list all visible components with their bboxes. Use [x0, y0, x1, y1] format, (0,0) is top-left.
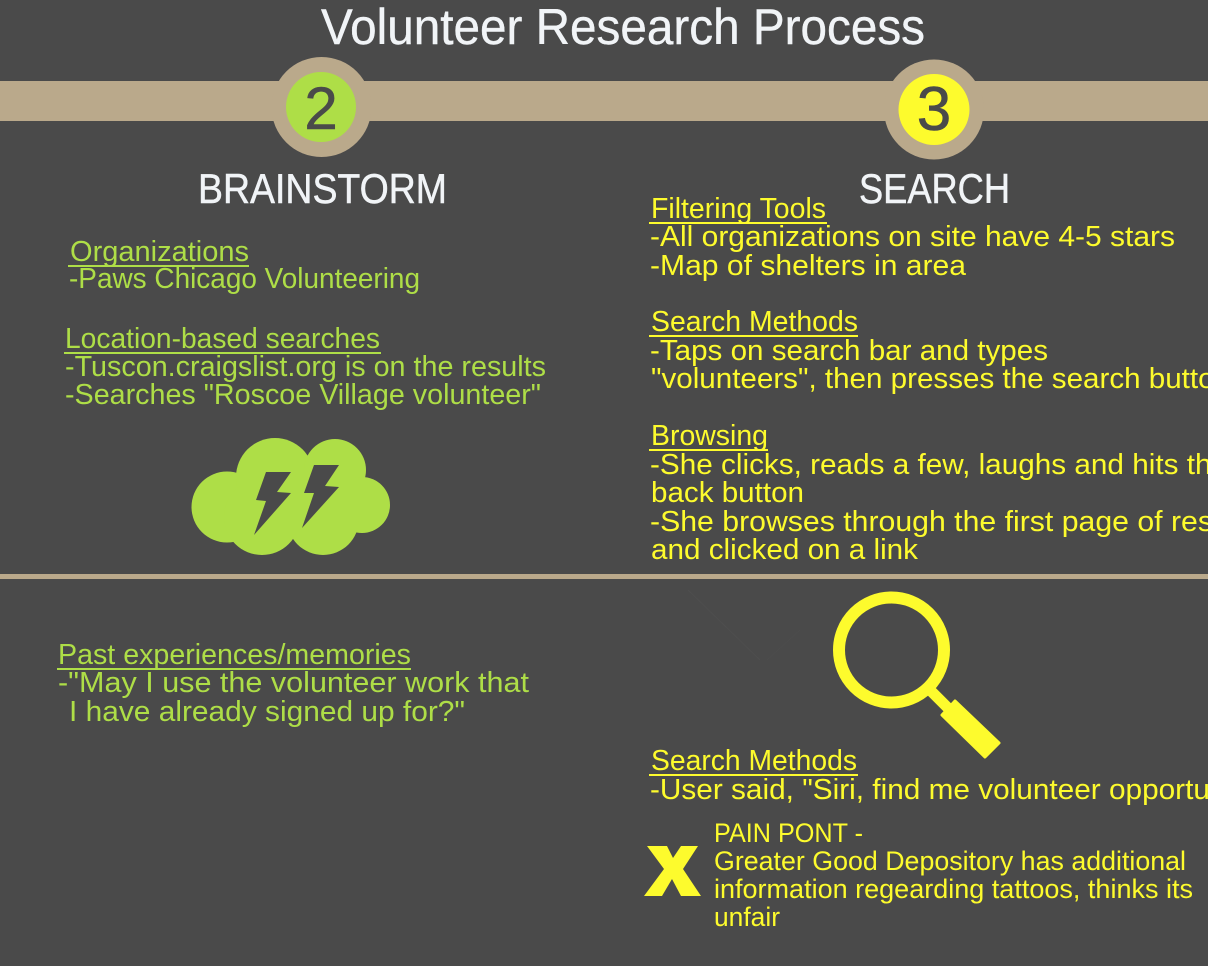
step 3 badge: 3	[917, 75, 951, 144]
callout: pain point: PAIN PONT -	[714, 818, 863, 848]
text block: browsing: -She clicks, reads a few, laughs and hits the	[650, 449, 1208, 481]
text block: search methods: Search Methods	[651, 306, 858, 338]
text block: organizations	[68, 236, 420, 295]
text block: search methods voice: Search Methods	[651, 745, 857, 777]
step 2 badge	[272, 57, 372, 157]
callout: pain point: information regearding tattoos, thinks its	[714, 874, 1193, 904]
icon: storm cloud	[192, 438, 390, 555]
callout: pain point: unfair	[714, 902, 780, 932]
text block: search methods voice	[649, 745, 1208, 806]
text block: past experiences: I have already signed up for?"	[69, 696, 465, 728]
text block: browsing: and clicked on a link	[651, 534, 919, 566]
step 2 badge: 2	[304, 75, 338, 142]
text block: location-based searches: Location-based searches	[65, 323, 380, 355]
text block: filtering tools: -All organizations on site have 4-5 stars	[650, 221, 1175, 253]
text block: search methods: "volunteers", then presses the search button	[651, 363, 1208, 395]
heading: brainstorm: BRAINSTORM	[198, 165, 447, 212]
text block: browsing: back button	[651, 477, 804, 509]
text block: filtering tools: Filtering Tools	[651, 193, 826, 225]
text block: location-based searches: -Tuscon.craigslist.org is on the results	[65, 351, 546, 383]
section divider	[0, 574, 1208, 579]
title: Volunteer Research Process	[321, 0, 925, 55]
callout: pain point: Greater Good Depository has additional	[714, 846, 1186, 876]
text block: browsing	[649, 420, 1208, 566]
text block: past experiences: Past experiences/memories	[58, 639, 411, 671]
text block: search methods: -Taps on search bar and types	[650, 335, 1048, 367]
text block: organizations: -Paws Chicago Volunteering	[69, 263, 420, 295]
text block: filtering tools	[649, 193, 1175, 282]
text block: location-based searches	[64, 323, 546, 411]
text block: browsing: Browsing	[651, 420, 768, 452]
text block: organizations: Organizations	[70, 236, 249, 268]
step 3 badge	[884, 60, 984, 160]
heading: search: SEARCH	[859, 165, 1010, 212]
text block: filtering tools: -Map of shelters in area	[650, 250, 967, 282]
icon: magnifying glass	[839, 598, 999, 757]
text block: location-based searches: -Searches "Roscoe Village volunteer"	[65, 379, 541, 411]
text block: past experiences: -"May I use the volunteer work that	[58, 667, 529, 699]
icon: x mark	[644, 846, 701, 896]
text block: past experiences	[57, 639, 529, 728]
callout: pain point	[714, 818, 1193, 932]
timeline band	[0, 81, 1208, 121]
text block: search methods	[649, 306, 1208, 395]
